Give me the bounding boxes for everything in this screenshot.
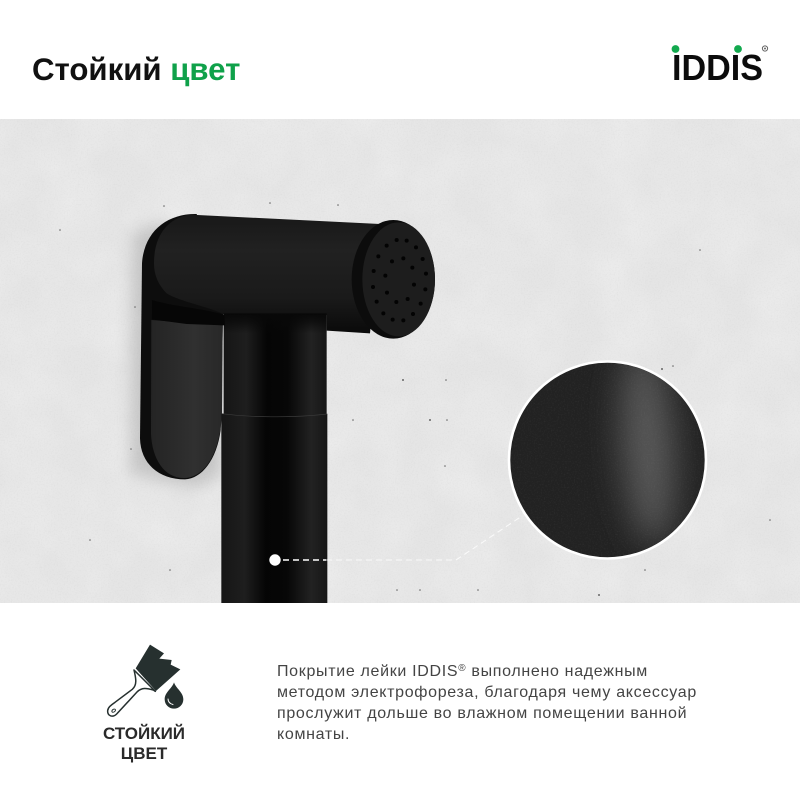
lower stem: [221, 414, 327, 603]
paint drop: [165, 682, 183, 709]
concrete speckles: [59, 202, 771, 596]
icon: paint brush with drop: [106, 644, 184, 717]
wall plate: [140, 214, 223, 479]
text block: description: Покрытие лейки IDDIS® выполнено надежным: [277, 663, 648, 680]
plate shadow: [130, 220, 220, 487]
panel: product photo on concrete: [0, 119, 800, 603]
lever: [151, 320, 223, 478]
barrel: [154, 215, 380, 333]
brush bristles: [136, 645, 180, 691]
title: Стойкий цвет: [32, 52, 240, 87]
shadow under barrel: [152, 300, 225, 325]
head rim: [352, 220, 435, 339]
brush handle: [108, 670, 155, 716]
drop highlight: [168, 699, 173, 705]
callout dashed leader line: [283, 516, 522, 560]
icon label: СТОЙКИЙ: [103, 724, 185, 743]
icon label: ЦВЕТ: [121, 744, 167, 763]
text block: description: комнаты.: [277, 726, 350, 743]
icon label: [103, 724, 185, 763]
text block: description: методом электрофореза, благодаря чему аксессуар: [277, 684, 697, 701]
spray holes: [371, 238, 428, 322]
text block: description: [277, 663, 697, 743]
icon: bidet sprayer: [130, 214, 435, 603]
head face: [362, 222, 435, 336]
text block: description: прослужит дольше во влажном помещении ванной: [277, 705, 687, 722]
upper stem: [224, 310, 327, 415]
callout: coating close-up: [508, 343, 708, 560]
handle hole: [111, 708, 116, 713]
callout dot: [269, 554, 281, 566]
stem top shadow: [224, 313, 327, 333]
joint line: [222, 414, 327, 417]
